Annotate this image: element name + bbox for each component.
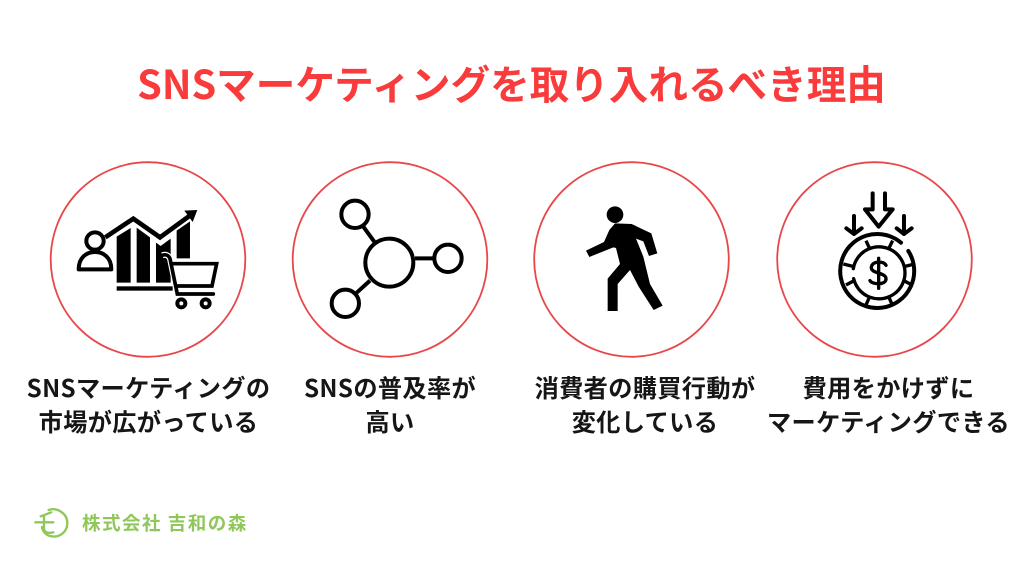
- label: cost: マーケティングできる: [767, 403, 1010, 438]
- circle: walking: [534, 162, 729, 357]
- circle: network: [293, 162, 487, 357]
- label: cost: 費用をかけずに: [803, 369, 974, 404]
- title: SNSマーケティングを取り入れるべき理由: [137, 54, 886, 111]
- label: adoption: [304, 369, 476, 438]
- circle: cost: [777, 162, 972, 357]
- icon: walking person: [586, 206, 663, 311]
- company name: 株式会社 吉和の森: [82, 510, 248, 536]
- icon: network nodes: [332, 201, 462, 317]
- label: market: [27, 369, 270, 438]
- label: market: 市場が広がっている: [39, 403, 258, 438]
- label: market: SNSマーケティングの: [27, 369, 270, 404]
- circle: market: [51, 162, 245, 357]
- label: adoption: 高い: [365, 403, 415, 438]
- icon: market chart with person and cart: [79, 210, 217, 307]
- icon: company logo mark: [35, 509, 67, 537]
- label: adoption: SNSの普及率が: [304, 369, 476, 404]
- icon: coin with down arrows: [840, 193, 915, 308]
- label: behaviour: 変化している: [572, 403, 718, 438]
- label: behaviour: 消費者の購買行動が: [535, 369, 755, 404]
- label: behaviour: [535, 369, 755, 438]
- label: cost: [767, 369, 1010, 438]
